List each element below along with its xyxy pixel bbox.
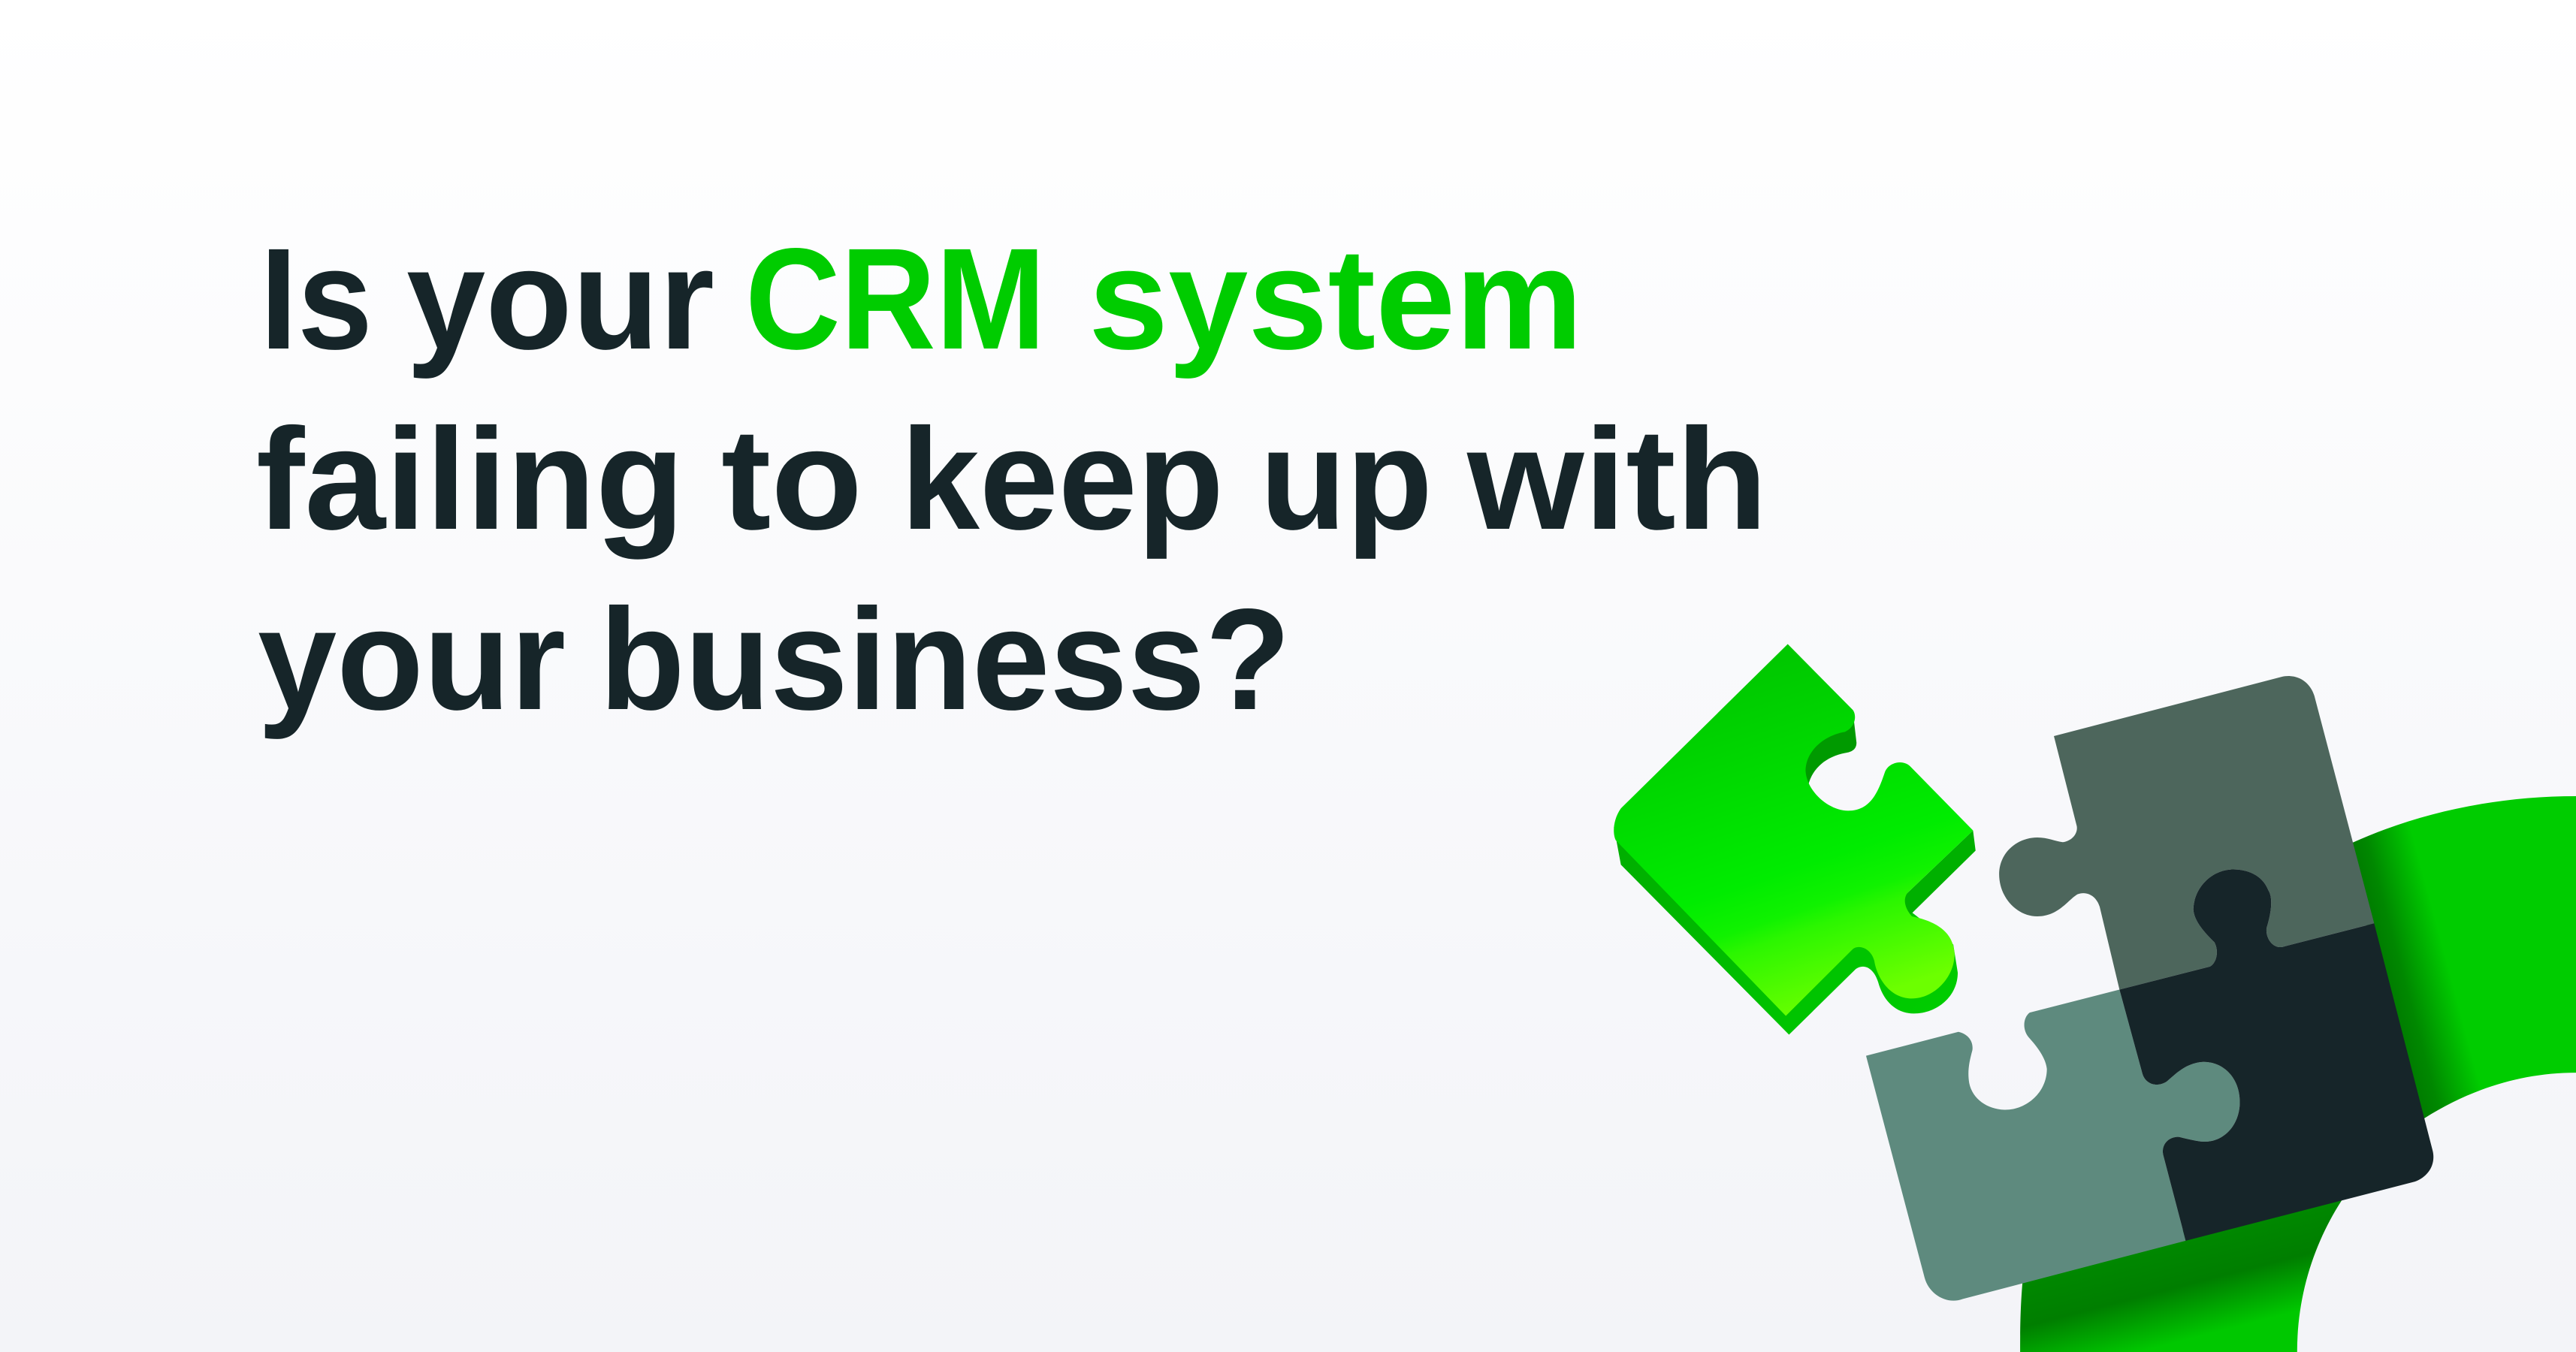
title line 1: system xyxy=(1089,218,1583,379)
puzzle piece: grey xyxy=(1999,676,2374,990)
green piece top face xyxy=(1614,644,1973,1016)
green piece underside xyxy=(1614,827,1958,1035)
title line 3 xyxy=(258,578,1291,740)
green piece notch wall xyxy=(1794,710,1856,786)
title line 2: with xyxy=(1466,398,1768,560)
title line 3: your xyxy=(258,578,566,740)
title line 1: Is xyxy=(260,218,373,379)
title line 2: failing xyxy=(256,398,684,560)
title line 2: to xyxy=(721,398,862,560)
puzzle piece: teal xyxy=(1866,990,2240,1301)
title line 1: CRM xyxy=(745,218,1046,379)
title line 2: keep xyxy=(901,398,1224,560)
puzzle piece: bright green xyxy=(1614,644,1976,1035)
title line 1: your xyxy=(406,218,714,379)
title line 1 xyxy=(260,218,1583,379)
puzzle piece: dark xyxy=(2119,870,2433,1241)
title line 3: business? xyxy=(599,578,1291,740)
puzzle illustration xyxy=(1614,644,2576,1352)
title xyxy=(256,218,1768,740)
green piece right wall xyxy=(1904,831,1976,915)
green arc band: bottom xyxy=(2020,1188,2342,1352)
title line 2: up xyxy=(1260,398,1433,560)
green arc band: right xyxy=(2353,796,2576,1118)
title line 2 xyxy=(256,398,1768,560)
